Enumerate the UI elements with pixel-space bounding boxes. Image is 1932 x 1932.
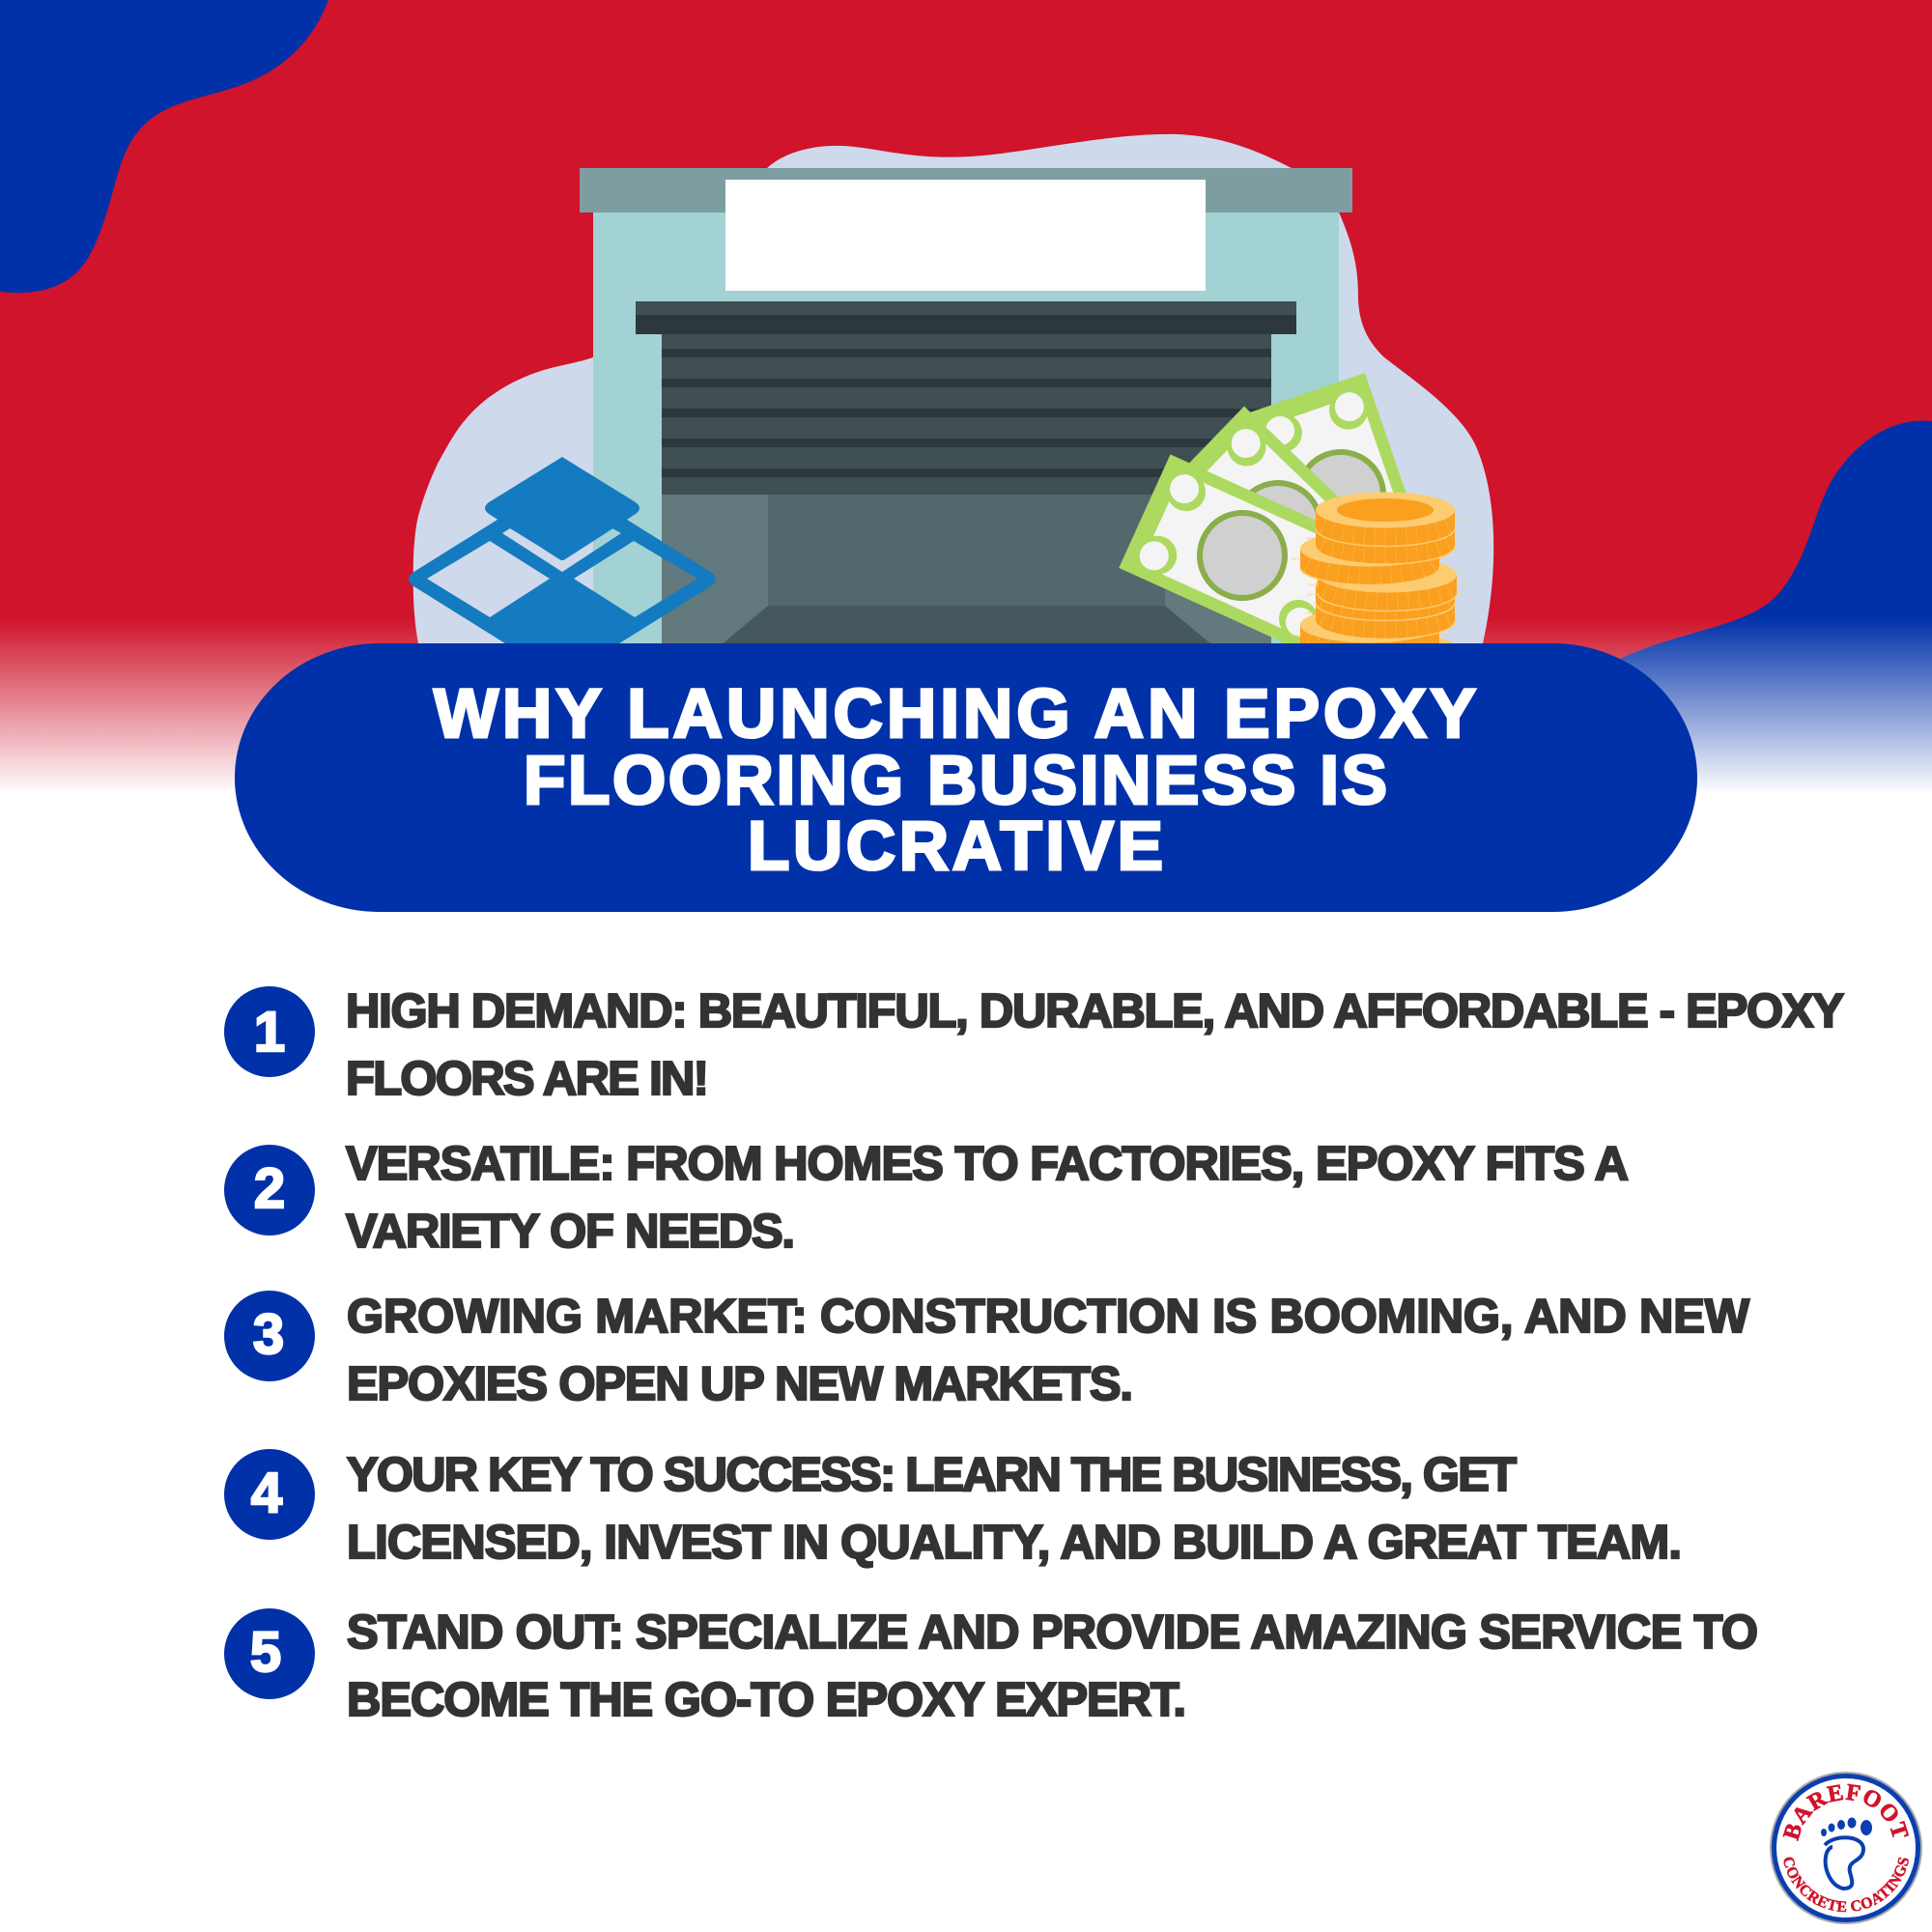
number badge 5: 5 xyxy=(250,1621,281,1684)
number badge 2 xyxy=(224,1145,315,1236)
roller shutter xyxy=(662,334,1271,495)
logo foot icon xyxy=(1821,1818,1872,1889)
list item 3 xyxy=(224,1291,1750,1410)
text item 5 xyxy=(347,1606,1758,1726)
number badge 4: 4 xyxy=(251,1462,282,1524)
text item 2 xyxy=(346,1138,1629,1258)
text item 4: YOUR KEY TO SUCCESS: LEARN THE BUSINESS, GET xyxy=(347,1449,1517,1501)
title: FLOORING BUSINESS IS xyxy=(524,743,1387,819)
text item 5: BECOME THE GO-TO EPOXY EXPERT. xyxy=(347,1674,1186,1726)
shutter housing xyxy=(636,301,1296,334)
title: WHY LAUNCHING AN EPOXY xyxy=(434,676,1476,753)
blank sign xyxy=(725,180,1206,291)
text item 1 xyxy=(346,985,1844,1105)
list item 4 xyxy=(224,1449,1682,1569)
text item 2: VARIETY OF NEEDS. xyxy=(346,1206,795,1258)
text item 3 xyxy=(347,1291,1750,1410)
logo: Barefoot Concrete Coatings xyxy=(1770,1772,1922,1924)
number badge 3 xyxy=(224,1291,315,1381)
icon: gold coin stack xyxy=(1291,493,1466,643)
text item 1: HIGH DEMAND: BEAUTIFUL, DURABLE, AND AFFORDABLE - EPOXY xyxy=(346,985,1844,1037)
number badge 4 xyxy=(224,1449,315,1540)
text item 2: VERSATILE: FROM HOMES TO FACTORIES, EPOXY FITS A xyxy=(346,1138,1629,1190)
illustration: storefront xyxy=(580,168,1352,644)
icon: blue floor tiles xyxy=(409,457,716,643)
text item 4 xyxy=(347,1449,1682,1569)
number badge 1: 1 xyxy=(254,1001,285,1064)
text item 1: FLOORS ARE IN! xyxy=(346,1053,709,1105)
number badge 5 xyxy=(224,1608,315,1699)
background: white fade xyxy=(0,618,1932,794)
logo arcs for lettering xyxy=(1798,1800,1894,1861)
illustration: light blob behind storefront xyxy=(413,134,1493,643)
text item 3: EPOXIES OPEN UP NEW MARKETS. xyxy=(347,1358,1133,1410)
text item 3: GROWING MARKET: CONSTRUCTION IS BOOMING, AND NEW xyxy=(347,1291,1750,1343)
icon: banknotes xyxy=(1119,373,1406,643)
list item 1 xyxy=(224,985,1844,1105)
background: white lower area xyxy=(0,794,1932,1932)
number badge 1 xyxy=(224,986,315,1077)
logo: Barefoot Concrete Coatings: CONCRETE COATINGS xyxy=(1783,1857,1909,1913)
list item 2 xyxy=(224,1138,1629,1258)
number badge 2: 2 xyxy=(254,1157,285,1220)
title banner xyxy=(235,643,1697,912)
text item 4: LICENSED, INVEST IN QUALITY, AND BUILD A GREAT TEAM. xyxy=(347,1517,1682,1569)
logo: Barefoot Concrete Coatings: BAREFOOT xyxy=(1782,1783,1909,1841)
decoration: top-left blue blob xyxy=(0,0,328,293)
storefront wall xyxy=(593,213,1339,644)
title xyxy=(434,676,1476,885)
number badge 3: 3 xyxy=(253,1303,284,1366)
title: LUCRATIVE xyxy=(748,809,1163,885)
list item 5 xyxy=(224,1606,1758,1726)
background: red field xyxy=(0,0,1932,802)
text item 5: STAND OUT: SPECIALIZE AND PROVIDE AMAZING SERVICE TO xyxy=(347,1606,1758,1659)
storefront roof xyxy=(580,168,1352,213)
interior of garage xyxy=(662,495,1271,644)
decoration: right blue blob xyxy=(1584,421,1932,802)
